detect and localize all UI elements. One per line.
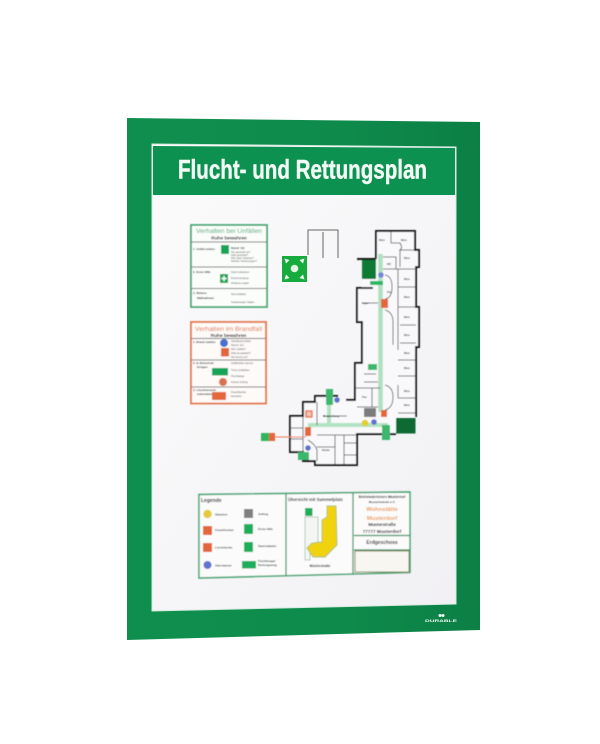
legend title: Legende (201, 498, 222, 504)
heading: fire: Verhalten im Brandfall (195, 326, 262, 333)
address block: Musterbetrieb e.V. (369, 500, 396, 504)
accident instruction notes: Wie viele Verletzte? (231, 256, 254, 260)
room labels: Büro (404, 334, 410, 337)
route signs (298, 281, 390, 460)
title: Flucht- und Rettungsplan (178, 154, 427, 184)
legend labels (215, 512, 277, 568)
fire instruction notes: Gefährdete warnen (231, 361, 254, 365)
legend labels: Aufzug (258, 512, 268, 516)
accident instruction notes: Notruf absetzen (231, 270, 250, 274)
building floor fill (290, 231, 419, 465)
step labels (193, 340, 216, 396)
icon: emergency phone (221, 245, 229, 254)
accident instruction notes: Notruf: 112 (231, 246, 245, 250)
room labels: Küche (322, 449, 330, 452)
heading: accidents: Verhalten bei Unfällen (196, 228, 262, 235)
lift (364, 408, 376, 417)
room labels: Büro (404, 390, 410, 393)
icon: assembly point (282, 256, 307, 282)
room labels: WC (387, 263, 391, 266)
address block: Musterstraße (368, 522, 396, 527)
fire instruction notes (231, 339, 254, 398)
fire instruction notes: Handfeuermelder (231, 339, 251, 343)
legend labels: Rettungsweg (258, 563, 277, 567)
legend labels: Erste Hilfe (258, 527, 273, 531)
step labels: 1. Unfall melden (193, 247, 215, 251)
extinguisher signs (305, 299, 388, 436)
green stairwell bottom (396, 418, 416, 434)
room labels: Lager (362, 302, 369, 305)
step labels: Maßnahmen (197, 296, 214, 300)
title banner (153, 146, 455, 195)
step labels: unternehmen (197, 392, 216, 396)
address block: Wohnstätte (366, 507, 399, 513)
accident instruction notes: Erstversorgung (231, 276, 249, 280)
fire icons (212, 339, 229, 400)
fire instruction notes: benutzen (231, 394, 242, 398)
subheading: stay calm: Ruhe bewahren (211, 236, 247, 242)
stair outline (308, 230, 338, 258)
panel: fire instructions (191, 322, 266, 404)
fire instruction notes: Wer meldet? (231, 347, 246, 351)
panel: legend and building info (199, 492, 410, 578)
accident instruction notes: Wo geschah es? (231, 250, 251, 254)
external exit sign and route (261, 433, 306, 441)
step labels: 1. Brand melden (193, 340, 216, 344)
room labels: Büro (401, 239, 407, 242)
accident instruction notes: Anweisungen folgen (231, 300, 255, 304)
accident instruction notes (231, 246, 257, 304)
subheading: stay calm: Ruhe bewahren (211, 333, 246, 339)
room labels: Büro (404, 352, 410, 355)
overview caption: Musterstraße (310, 564, 331, 568)
room labels: Büro (379, 239, 385, 242)
accident instruction notes: Sammelplatz (231, 292, 247, 296)
step labels: 2. In Sicherheit (193, 361, 214, 365)
fire instruction notes: Was ist passiert? (231, 351, 251, 355)
fire instruction notes: Türen schließen (231, 368, 250, 372)
room labels: Flur (387, 291, 392, 294)
fire instruction notes: Notruf: 112 (231, 343, 244, 347)
room labels: Büro (404, 257, 410, 260)
legend labels: Feuerlöscher (215, 528, 235, 532)
room labels: Besprechung (323, 415, 339, 418)
legend labels: Löschdecke (215, 546, 233, 550)
legend labels: Standort (215, 512, 227, 516)
step labels: 3. Löschversuch (193, 388, 216, 392)
overview map (305, 506, 337, 560)
accident instruction notes: Welche Verletzungen? (231, 259, 257, 263)
address block (359, 495, 406, 534)
legend labels: Alarmtaster (215, 564, 233, 568)
room labels: Flur (362, 396, 367, 399)
empty info box (355, 551, 409, 572)
floor label: Erdgeschoss (366, 540, 398, 546)
room labels: Büro (404, 296, 410, 299)
step labels (193, 247, 215, 300)
room labels: Büro (404, 278, 410, 281)
step labels: 3. Weitere (193, 291, 207, 295)
accident instruction notes: Was geschah? (231, 253, 249, 257)
green stairwell top (362, 260, 376, 279)
step labels: bringen (197, 365, 208, 369)
address block: 77777 Musterdorf (363, 529, 402, 534)
green display frame (127, 118, 480, 640)
fire instruction notes: Wo brennt es? (231, 355, 248, 359)
legend icons (203, 509, 256, 569)
fire instruction notes: Feuerlöscher (231, 390, 246, 394)
panel: accident instructions (191, 225, 267, 307)
room labels: Büro (404, 404, 410, 407)
legend labels: Sammelplatz (258, 544, 277, 548)
blue alarm markers (305, 272, 384, 451)
corridor escape route (378, 254, 383, 412)
building outline (290, 231, 419, 465)
brand name: DURABLE (425, 618, 458, 623)
white poster sheet (152, 144, 456, 611)
icon: first aid cross (220, 274, 228, 283)
step labels: 2. Erste Hilfe (193, 270, 211, 274)
accident instruction notes: Weiteres regeln (231, 281, 250, 285)
fire instruction notes: Keinen Aufzug (231, 380, 248, 384)
yellow assembly marker (362, 420, 368, 426)
address block: Musterdorf (367, 516, 397, 522)
room labels: Büro (404, 367, 410, 370)
floor plan (261, 231, 419, 465)
room labels: Büro (404, 316, 410, 319)
fire instruction notes: Fluchtwege (231, 374, 245, 378)
legend labels: Fluchtwege/ (258, 559, 276, 563)
room labels (322, 239, 410, 452)
address block: Betriebsbrücken Musterhof (359, 495, 406, 499)
overview title: Übersicht mit Sammelplatz (288, 497, 343, 502)
brand logo (425, 614, 458, 623)
interior walls (290, 231, 419, 465)
